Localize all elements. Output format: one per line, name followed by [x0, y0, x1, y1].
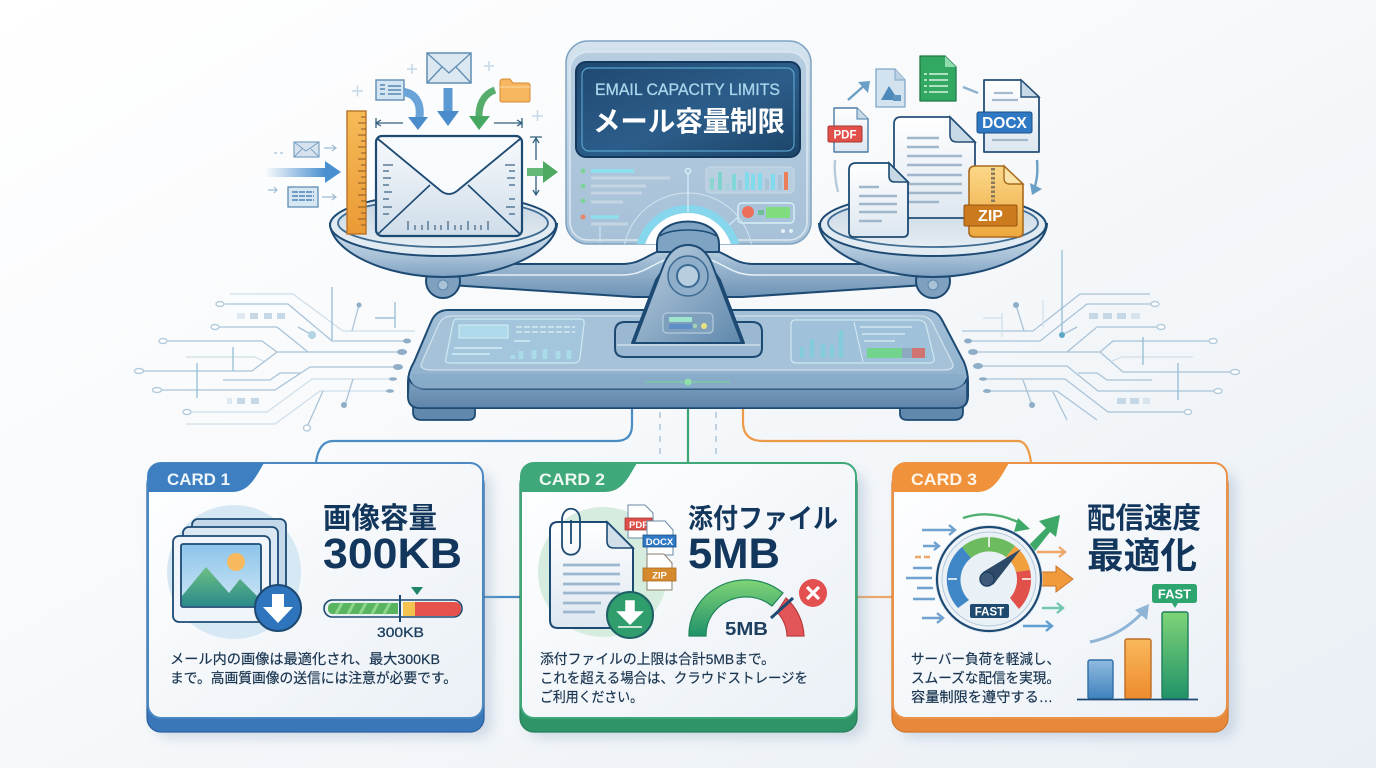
icon: image file	[876, 69, 905, 107]
card 2 tab: CARD 2	[539, 470, 605, 489]
limit label: 300KB	[377, 624, 424, 640]
card 2 tab	[521, 463, 637, 492]
icons: incoming items above envelope	[352, 53, 543, 195]
icon: small file stack	[625, 505, 676, 590]
icon: folder	[500, 79, 530, 102]
card 1 tab: CARD 1	[167, 470, 230, 489]
card 3 heading: 配信速度	[1087, 502, 1201, 535]
arrow: green out	[527, 161, 558, 183]
arrow: curved blue	[404, 92, 428, 130]
card 3 description	[911, 651, 1060, 705]
icon: front document	[849, 163, 908, 237]
scale base	[408, 310, 968, 420]
arrow: orange right	[1040, 566, 1073, 592]
card 2 heading: 添付ファイル	[688, 504, 838, 534]
arrow: down blue	[437, 88, 459, 126]
left pan	[330, 194, 557, 298]
icon: small file stack: PDF	[629, 520, 648, 531]
card 1 description	[170, 651, 457, 686]
icon: PDF file: PDF	[834, 130, 856, 142]
dimension arrows	[376, 118, 542, 195]
icon: large envelope	[376, 136, 522, 236]
card 1: image capacity	[147, 463, 492, 738]
card 1 tab	[148, 463, 264, 492]
monitor indicator	[726, 203, 794, 233]
bar chart	[1077, 584, 1198, 700]
card 1 description: まで。高画質画像の送信には注意が必要です。	[170, 670, 457, 686]
base feet	[413, 405, 963, 420]
card 3 tab: CARD 3	[911, 470, 977, 489]
icon: ruler	[347, 111, 366, 234]
icon: ZIP file: ZIP	[978, 208, 1003, 225]
card 3 description: スムーズな配信を実現。	[911, 670, 1060, 686]
scale pivot and stand	[615, 222, 762, 357]
scale beam	[450, 246, 925, 297]
card 2 description: ご利用ください。	[540, 689, 643, 705]
connector lines from base to cards	[316, 408, 1031, 597]
card 1 value: 300KB	[323, 530, 462, 578]
monitor bar chart	[706, 167, 794, 193]
card 3 value: 最適化	[1087, 535, 1197, 576]
card 2 description: 添付ファイルの上限は合計5MBまで。	[540, 651, 775, 667]
pivot wheel	[668, 256, 708, 296]
icons: items left of envelope	[265, 142, 558, 207]
bar chart label: FAST	[1158, 586, 1191, 602]
paperclip	[562, 509, 580, 555]
icon: speedometer	[935, 525, 1043, 633]
arrow: green rising	[1021, 515, 1060, 560]
stand status panel	[663, 313, 713, 333]
card 2 description: これを超える場合は、クラウドストレージを	[540, 670, 808, 686]
arrow: curved green	[469, 90, 495, 130]
icon: table card	[288, 187, 318, 207]
monitor panel	[565, 40, 812, 245]
card 2 description	[540, 651, 808, 705]
right pan	[819, 194, 1047, 298]
title english: EMAIL CAPACITY LIMITS	[595, 80, 780, 99]
left base screen	[446, 319, 584, 363]
card 3 description: サーバー負荷を軽減し、	[911, 651, 1060, 667]
card 3 tab	[893, 463, 1009, 492]
icon: DOCX file: DOCX	[982, 115, 1028, 132]
card 1 limit bar	[324, 587, 462, 640]
icon: large document	[894, 117, 975, 218]
icon: PDF file	[828, 108, 868, 152]
icon: small file stack: ZIP	[652, 570, 668, 582]
icon: image stack with download	[167, 505, 301, 639]
icon: small file stack: DOCX	[646, 537, 674, 548]
icon: list card	[376, 80, 404, 100]
icon: mini envelope	[294, 142, 319, 157]
gauge label: 5MB	[725, 619, 768, 639]
speed arrows	[906, 514, 1065, 631]
icons: document cluster on right pan	[828, 56, 1042, 237]
card 1 heading: 画像容量	[323, 502, 437, 535]
title japanese: メール容量制限	[593, 106, 785, 137]
icon: spreadsheet file	[920, 56, 956, 101]
arrow: blue to ruler	[265, 161, 341, 183]
card 2 value: 5MB	[688, 530, 780, 578]
title screen	[576, 62, 800, 157]
speedometer label: FAST	[975, 606, 1004, 618]
right base screen	[791, 320, 934, 363]
icon: attachment document	[538, 507, 668, 638]
icon: over-limit cross	[799, 579, 827, 607]
card 1 description: メール内の画像は最適化され、最大300KB	[170, 651, 440, 667]
card 2: attachment size	[520, 463, 865, 738]
limit gauge	[689, 579, 827, 639]
icon: ZIP file	[964, 166, 1023, 237]
icon: small envelope	[427, 53, 471, 83]
monitor status list	[580, 168, 670, 242]
icon: DOCX file	[977, 80, 1039, 152]
card 3: delivery speed	[892, 463, 1236, 738]
circuit pattern: right	[962, 250, 1240, 420]
circuit pattern: left	[134, 287, 415, 431]
base status light	[645, 378, 730, 386]
card 3 description: 容量制限を遵守する…	[911, 689, 1053, 705]
